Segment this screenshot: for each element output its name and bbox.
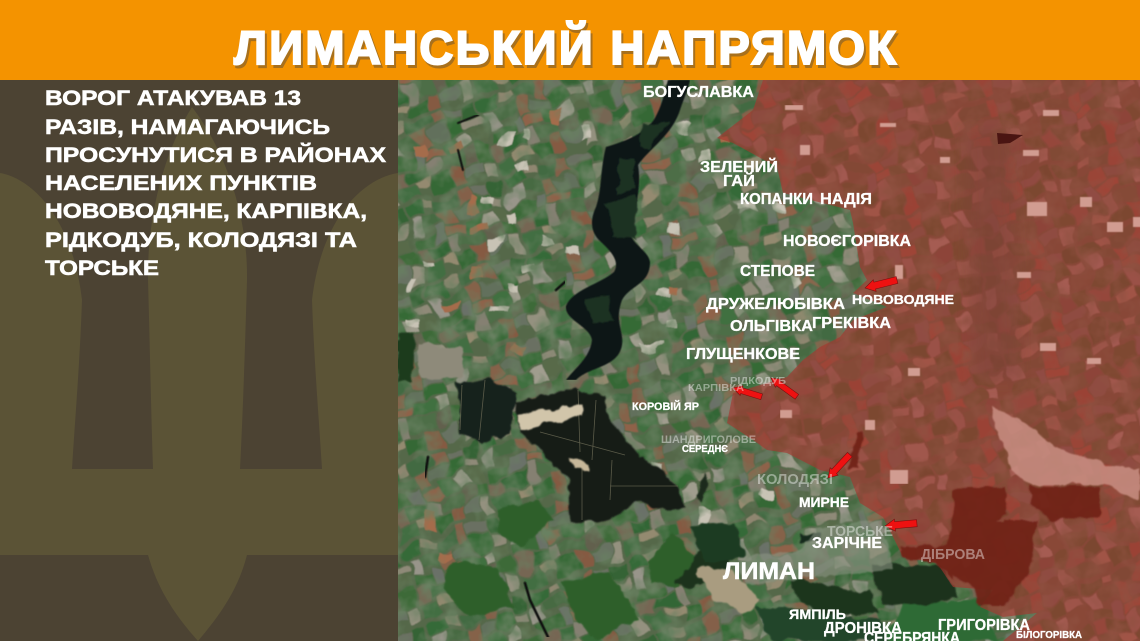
town labels: МИРНЕ bbox=[799, 494, 849, 510]
town labels: ЯМПІЛЬ bbox=[789, 606, 846, 622]
town labels: ЗАРІЧНЕ bbox=[812, 535, 882, 552]
town labels: СТЕПОВЕ bbox=[740, 263, 815, 280]
left panel text: НОВОВОДЯНЕ, КАРПІВКА, bbox=[45, 199, 367, 223]
arrow: Карпівка bbox=[732, 386, 763, 400]
left panel text: ТОРСЬКЕ bbox=[45, 256, 159, 280]
town labels: РІДКОДУБ bbox=[730, 375, 786, 387]
pale fields in occupied zone bbox=[780, 105, 1140, 484]
brown strip in occupied zone bbox=[965, 130, 1020, 380]
vegetation mottling bbox=[398, 80, 1140, 641]
town labels: БІЛОГОРІВКА bbox=[1016, 630, 1082, 641]
title: ЛИМАНСЬКИЙ НАПРЯМОК bbox=[234, 21, 896, 74]
map base: farmland bbox=[380, 60, 1140, 641]
watermark trident bbox=[0, 107, 398, 641]
town area near Liman bbox=[740, 520, 895, 585]
arrow: Торське bbox=[884, 518, 918, 532]
streams bbox=[425, 115, 565, 637]
river and reservoir bbox=[566, 80, 690, 380]
arrow: Нововодяне bbox=[864, 276, 898, 292]
river islands bbox=[585, 120, 668, 322]
town labels: ДРОНІВКА bbox=[824, 620, 902, 637]
town labels: ОЛЬГІВКА bbox=[730, 318, 813, 335]
woodland and forests bbox=[398, 333, 995, 641]
town labels: ДІБРОВА bbox=[921, 547, 986, 563]
town labels: ГРИГОРІВКА bbox=[938, 617, 1030, 634]
pond in occupied zone bbox=[997, 133, 1023, 144]
arrow: Колодязі bbox=[828, 452, 852, 478]
light fields bbox=[408, 122, 804, 524]
town labels: ГЛУЩЕНКОВЕ bbox=[686, 346, 800, 363]
arrow: Рідкодуб bbox=[770, 378, 799, 400]
red occupied zone bbox=[717, 80, 1140, 641]
sand patches and settlement bbox=[418, 342, 760, 612]
town labels: ТОРСЬКЕ bbox=[827, 524, 893, 540]
town labels: СЕРЕДНЄ bbox=[682, 444, 728, 455]
town labels: НОВОЄГОРІВКА bbox=[783, 233, 911, 250]
town labels: КОРОВІЙ ЯР bbox=[632, 400, 699, 413]
left panel text: ПРОСУНУТИСЯ В РАЙОНАХ bbox=[45, 142, 387, 167]
town labels: ШАНДРИГОЛОВЕ bbox=[661, 434, 756, 446]
town labels: БОГУСЛАВКА bbox=[643, 84, 754, 101]
left panel text: ВОРОГ АТАКУВАВ 13 bbox=[45, 86, 301, 110]
town labels: ДРУЖЕЛЮБІВКА bbox=[706, 296, 845, 313]
light quarry area in occupied zone bbox=[993, 407, 1140, 500]
left panel text: НАСЕЛЕНИХ ПУНКТІВ bbox=[45, 171, 317, 195]
forest tracks bbox=[460, 380, 678, 520]
town labels: ЗЕЛЕНИЙ bbox=[700, 158, 778, 176]
town labels: КОПАНКИ bbox=[740, 191, 813, 208]
satellite map bbox=[380, 60, 1140, 641]
town labels bbox=[632, 84, 1082, 641]
orange fields bbox=[411, 107, 733, 610]
left panel text: РІДКОДУБ, КОЛОДЯЗІ ТА bbox=[45, 228, 357, 252]
town labels: КАРПІВКА bbox=[688, 382, 744, 394]
left panel bbox=[0, 80, 398, 641]
town labels: НАДІЯ bbox=[820, 191, 872, 208]
town labels: ГАЙ bbox=[723, 172, 755, 190]
town labels: НОВОВОДЯНЕ bbox=[852, 292, 954, 307]
town labels: ЛИМАН bbox=[723, 558, 815, 585]
left panel text bbox=[45, 86, 387, 280]
town labels: КОЛОДЯЗІ bbox=[757, 472, 833, 488]
dark red forests bbox=[848, 432, 1100, 607]
left panel text: РАЗІВ, НАМАГАЮЧИСЬ bbox=[45, 115, 330, 139]
title banner bbox=[0, 0, 1140, 80]
town labels: ГРЕКІВКА bbox=[812, 315, 891, 332]
